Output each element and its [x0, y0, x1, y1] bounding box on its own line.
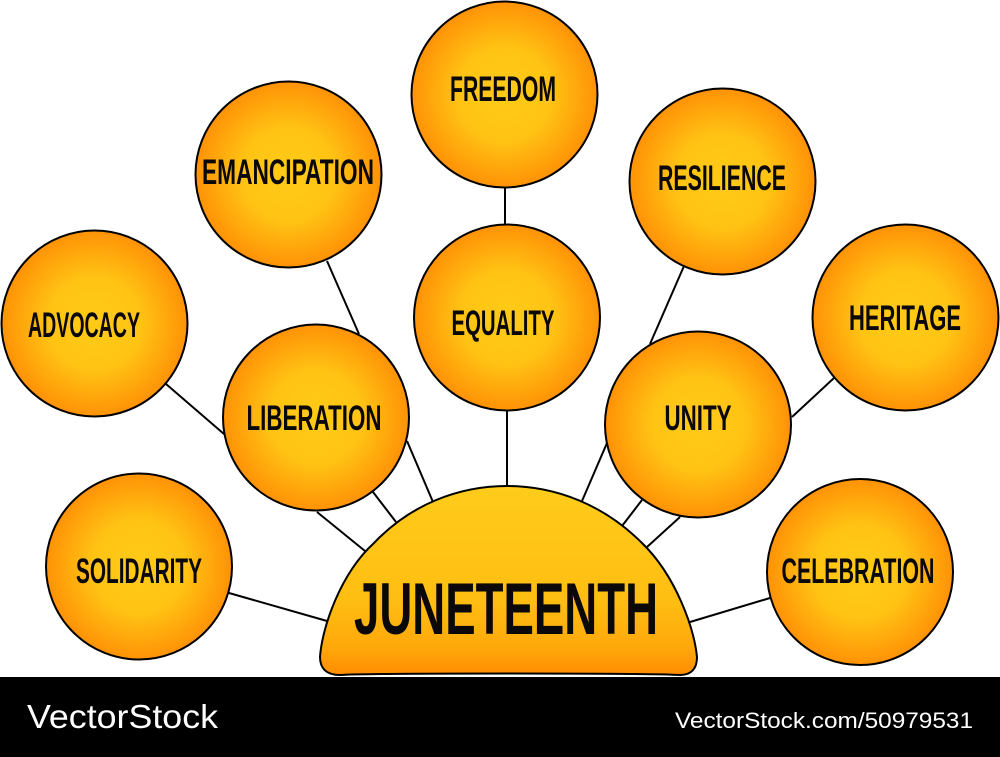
node: resilience: [630, 88, 816, 274]
footer image id: VectorStock.com/50979531: [675, 708, 973, 733]
connector lines: [166, 187, 834, 622]
node: equality: EQUALITY: [452, 304, 554, 343]
node: liberation: LIBERATION: [246, 399, 382, 438]
node: solidarity: [46, 474, 232, 660]
node: advocacy: ADVOCACY: [28, 306, 140, 345]
node: equality: [414, 224, 600, 410]
node: emancipation: EMANCIPATION: [202, 153, 374, 192]
node: celebration: [767, 479, 953, 665]
footer bar: [0, 677, 1000, 757]
node: liberation: [223, 324, 409, 510]
central dome: juneteenth: JUNETEENTH: [354, 569, 658, 650]
footer brand: VectorStock: [27, 698, 219, 735]
node: unity: [605, 332, 791, 518]
node: freedom: [412, 2, 598, 188]
central dome: juneteenth: [320, 486, 697, 675]
node: resilience: RESILIENCE: [658, 159, 786, 198]
node: unity: UNITY: [664, 399, 732, 438]
node: advocacy: [2, 230, 188, 416]
node: solidarity: SOLIDARITY: [76, 552, 202, 591]
node: emancipation: [196, 82, 382, 268]
node: heritage: [812, 224, 998, 410]
node: freedom: FREEDOM: [450, 70, 556, 109]
